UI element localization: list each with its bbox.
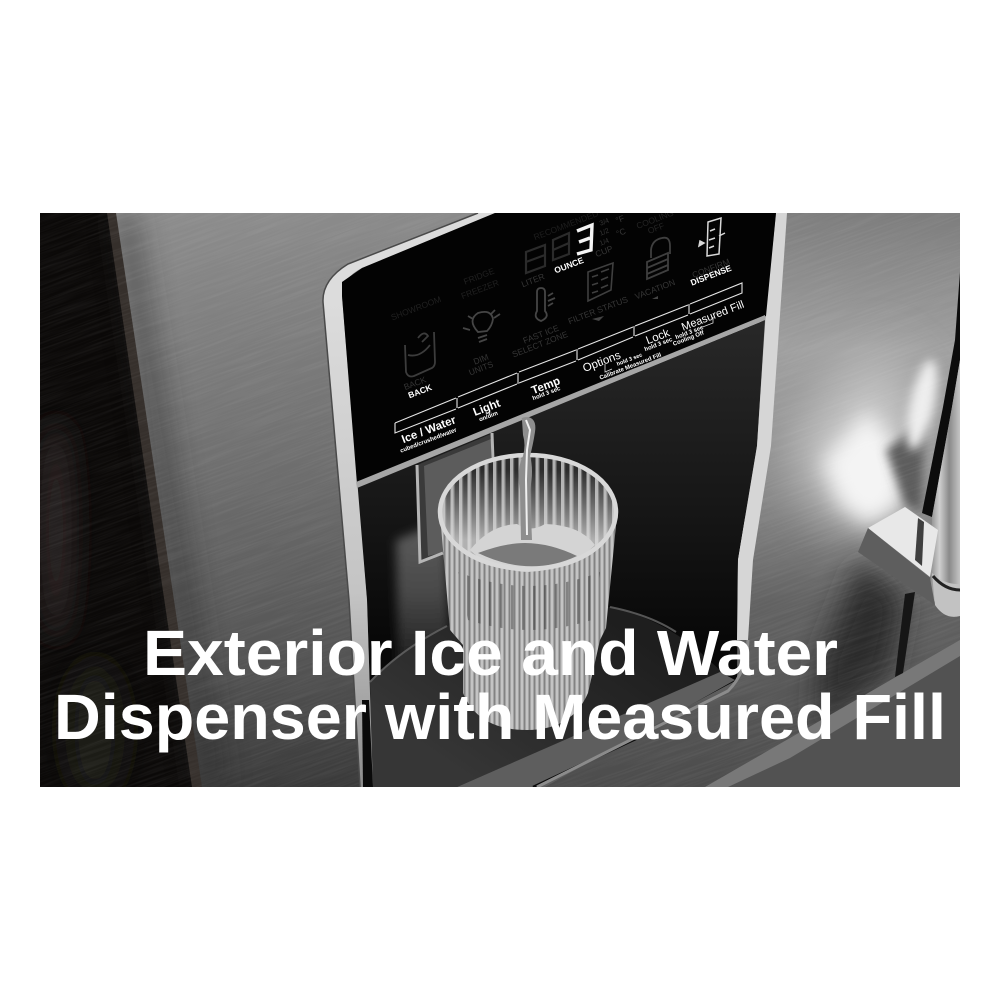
glass rim bbox=[440, 455, 616, 569]
water surface bbox=[470, 524, 595, 572]
dim panel words: FAST ICE bbox=[522, 323, 561, 346]
dim panel words: DIM bbox=[472, 352, 490, 367]
lower door steel bbox=[883, 656, 960, 733]
icon: triangle markers bbox=[592, 296, 658, 321]
dim panel words: CONFIRM bbox=[691, 256, 731, 280]
label: Measured Fill: Measured Fill bbox=[680, 299, 746, 334]
icon: filter list bbox=[588, 263, 613, 301]
icon: measuring gauge bbox=[699, 218, 725, 256]
icon: lock bbox=[647, 238, 670, 279]
water stream bbox=[519, 417, 535, 540]
left steel edge shading bbox=[116, 213, 218, 764]
dispenser niche bbox=[357, 320, 765, 787]
control panel, black glass bbox=[342, 213, 776, 484]
door gap below handle bbox=[895, 592, 915, 677]
right steel highlight and shadows bbox=[790, 350, 943, 730]
glass body bbox=[440, 515, 617, 730]
handle collar bbox=[932, 573, 960, 617]
label: cubed/crushed/water: cubed/crushed/water bbox=[400, 427, 458, 455]
infographic photo and title bbox=[40, 213, 960, 787]
handle standoff chrome stripe bbox=[915, 518, 924, 566]
panel text and icons bbox=[389, 208, 746, 455]
label: Options hold: hold 3 sec bbox=[616, 352, 643, 368]
niche back panel glow bbox=[396, 520, 450, 668]
lit digit bbox=[577, 225, 592, 254]
label: Ice / Water: Ice / Water bbox=[400, 414, 458, 446]
dim panel words bbox=[389, 208, 731, 392]
glass interior back wall bbox=[442, 457, 614, 556]
dim panel words: FRIDGE bbox=[462, 266, 496, 287]
dim panel words: SELECT ZONE bbox=[511, 329, 570, 359]
panel word: BACK lit: BACK bbox=[407, 382, 434, 400]
dim panel words: 1/4 bbox=[599, 238, 610, 248]
label: Temp hold: hold 3 sec bbox=[532, 386, 562, 402]
title line 1: Exterior Ice and Water bbox=[143, 617, 838, 689]
icon: cup with plant bbox=[405, 332, 435, 376]
label: Temp: Temp bbox=[530, 375, 562, 397]
dispenser floor tray bbox=[370, 605, 748, 787]
back wall fade bbox=[442, 475, 614, 556]
stainless door right of dispenser bbox=[520, 213, 960, 787]
dim panel words: COOLING bbox=[635, 208, 675, 231]
dim panel words: 3/4 bbox=[599, 218, 610, 228]
handle standoff top bbox=[868, 507, 938, 577]
handle standoff side bbox=[858, 528, 935, 605]
collar dark ring bbox=[933, 576, 960, 590]
dim panel words: BACK bbox=[402, 374, 428, 392]
door lower edge strip bbox=[705, 640, 960, 787]
bracket lines bbox=[605, 317, 713, 372]
label: Options: Options bbox=[581, 349, 623, 375]
label: Cooling Off: Cooling Off bbox=[672, 330, 706, 348]
stainless door left of dispenser bbox=[114, 213, 500, 787]
label: Light: Light bbox=[472, 398, 502, 419]
icon: light bulb bbox=[463, 310, 500, 342]
photo: refrigerator dispenser bbox=[40, 208, 960, 800]
label: on/dim: on/dim bbox=[478, 411, 499, 423]
dark rib reflections in body bbox=[458, 572, 600, 630]
label: Measured Fill hold: hold 3 sec bbox=[675, 325, 705, 341]
chrome frame around dispenser bbox=[323, 213, 787, 787]
door edge trim bbox=[107, 213, 202, 787]
dim panel words: LITER bbox=[520, 271, 546, 289]
handle shadow gap bbox=[922, 272, 960, 517]
label: Lock hold: hold 3 sec bbox=[644, 337, 674, 353]
panel word: DISPENSE lit: DISPENSE bbox=[689, 263, 733, 288]
handle tube bbox=[930, 360, 960, 610]
brushed metal texture bbox=[40, 213, 960, 787]
panel word: OUNCE lit: OUNCE bbox=[553, 255, 585, 275]
chrome strip below panel bbox=[356, 315, 765, 488]
dim panel words: SHOWROOM bbox=[389, 294, 442, 322]
left door panel, dark bbox=[40, 213, 192, 787]
dim panel words: OFF bbox=[646, 220, 666, 236]
title line 2: Dispenser with Measured Fill bbox=[54, 681, 946, 753]
dim seven segment digits bbox=[526, 233, 569, 273]
dim panel words: UNITS bbox=[467, 359, 495, 377]
dim panel words: 1/2 bbox=[599, 228, 610, 238]
icon: thermometer bbox=[536, 288, 555, 321]
back window behind glass bbox=[417, 433, 493, 562]
label: Lock: Lock bbox=[644, 327, 672, 347]
dim panel words: RECOMMENDED bbox=[532, 208, 600, 242]
dim panel words: °C bbox=[615, 226, 627, 239]
dim panel words: °F bbox=[614, 213, 626, 225]
glass tumbler bbox=[440, 417, 617, 730]
dim panel words: CUP bbox=[594, 243, 614, 259]
label: Calibrate Measured Fill: Calibrate Measured Fill bbox=[599, 352, 663, 382]
dim panel words: VACATION bbox=[633, 277, 676, 301]
button strip outline bbox=[395, 283, 742, 433]
dim panel words: FREEZER bbox=[460, 277, 500, 301]
title bbox=[54, 617, 946, 753]
dim panel words: FILTER STATUS bbox=[567, 294, 630, 326]
